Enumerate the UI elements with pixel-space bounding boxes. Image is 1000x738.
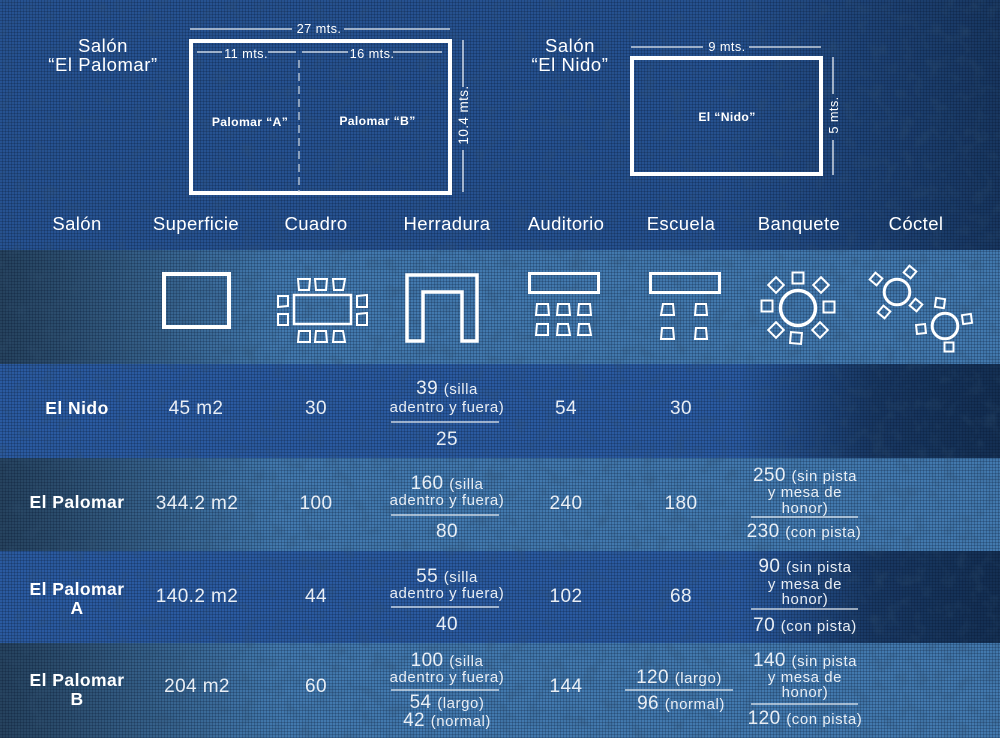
row: El Palomar A: honor): [782, 591, 828, 608]
dimension: 27 mts: 27 mts.: [297, 21, 341, 36]
icon: herradura layout: [407, 275, 477, 341]
table column headings: Auditorio: [528, 213, 604, 234]
row: El Palomar B: 100 (silla: [411, 650, 483, 671]
table column headings: Escuela: [647, 213, 716, 234]
title: Salón El Palomar: Salón: [78, 35, 128, 56]
table column headings: Salón: [52, 213, 102, 234]
table column headings: Superficie: [153, 213, 239, 234]
row: El Palomar A: 44: [305, 586, 327, 607]
table column headings: Cóctel: [889, 213, 943, 234]
icon: cóctel layout: [870, 266, 972, 352]
label: Palomar A: Palomar “A”: [212, 115, 288, 129]
row: El Palomar: honor): [782, 500, 828, 517]
row: El Palomar B: 60: [305, 676, 327, 697]
floor plan: El Palomar: [190, 21, 471, 193]
dimension: 10.4 mts: 10.4 mts.: [456, 85, 471, 145]
dimension: 9 mts: 9 mts.: [708, 39, 746, 54]
row: El Palomar B: 120 (largo): [636, 667, 722, 688]
row: El Palomar A: 55 (silla: [416, 566, 478, 587]
row: El Palomar B: 96 (normal): [637, 693, 725, 714]
row: El Nido: 45 m2: [169, 398, 223, 419]
row: El Palomar B: y mesa de: [768, 669, 842, 686]
dimension: 16 mts: [302, 46, 442, 61]
row: El Palomar B: [30, 650, 862, 731]
row: El Palomar: 80: [436, 521, 458, 542]
row: El Palomar: 100: [300, 493, 332, 514]
table column headings: Banquete: [758, 213, 840, 234]
label: Palomar B: Palomar “B”: [339, 114, 416, 128]
row: El Palomar: El Palomar: [30, 492, 124, 512]
row: El Nido: El Nido: [45, 398, 109, 418]
room outline: El Palomar: [191, 41, 450, 193]
row: El Palomar: 344.2 m2: [156, 493, 238, 514]
row: El Palomar B: 204 m2: [164, 676, 230, 697]
icon: escuela layout: [650, 274, 720, 339]
row: El Palomar B: adentro y fuera): [390, 669, 504, 686]
row: El Palomar: 240: [550, 493, 582, 514]
row: El Palomar B: 54 (largo): [410, 692, 484, 713]
room outline: El Nido: [632, 58, 821, 174]
row: El Nido: 25: [436, 429, 458, 450]
dimension: 11 mts: [197, 46, 296, 61]
row: El Nido: 54: [555, 398, 577, 419]
icon: banquete layout: [762, 272, 834, 344]
row: El Palomar: adentro y fuera): [390, 492, 504, 509]
row: El Nido: adentro y fuera): [390, 399, 504, 416]
table column headings: Herradura: [404, 213, 491, 234]
row: El Palomar: [30, 465, 861, 542]
icon: cuadro layout: [278, 279, 367, 342]
row: El Palomar: 160 (silla: [411, 473, 483, 494]
row: El Palomar A: 90 (sin pista: [758, 556, 852, 577]
row: El Nido: 30: [670, 398, 692, 419]
row: El Palomar B: 120 (con pista): [748, 708, 862, 729]
dimension: 5 mts: 5 mts.: [826, 96, 841, 134]
row: El Palomar: 180: [665, 493, 697, 514]
row: El Palomar B: 42 (normal): [403, 710, 491, 731]
dimension: 5 mts: [826, 57, 841, 175]
row: El Palomar A: [30, 556, 858, 636]
row: El Palomar A: 40: [436, 614, 458, 635]
row: El Palomar B: 144: [550, 676, 582, 697]
row: El Palomar B: 140 (sin pista: [753, 650, 857, 671]
floor plan: El Nido: [631, 39, 841, 175]
row: El Palomar: y mesa de: [768, 484, 842, 501]
row: El Nido: 30: [305, 398, 327, 419]
table column headings: [52, 213, 943, 234]
row: El Palomar A: 68: [670, 586, 692, 607]
label: El Nido: El “Nido”: [698, 110, 756, 124]
title: Salón El Nido: Salón: [545, 35, 595, 56]
row: El Palomar A: adentro y fuera): [390, 585, 504, 602]
row: El Palomar A: El Palomar: [30, 579, 124, 599]
title: Salón El Nido: [532, 35, 608, 75]
row: El Nido: 39 (silla: [416, 378, 478, 399]
dimension: 16 mts: 16 mts.: [350, 46, 394, 61]
title: Salón El Palomar: [48, 35, 158, 75]
row: El Palomar A: 140.2 m2: [156, 586, 238, 607]
row: El Nido: [45, 378, 692, 450]
row: El Palomar: 230 (con pista): [747, 521, 861, 542]
title: Salón El Palomar: “El Palomar”: [48, 54, 158, 75]
row: El Palomar B: honor): [782, 684, 828, 701]
row: El Palomar B: El Palomar: [30, 670, 124, 690]
icon: superficie: [164, 274, 229, 327]
row: El Palomar A: y mesa de: [768, 576, 842, 593]
row: El Palomar A: 70 (con pista): [753, 615, 857, 636]
title: Salón El Nido: “El Nido”: [532, 54, 608, 75]
row: El Palomar A: 102: [550, 586, 582, 607]
dimension: 11 mts: 11 mts.: [224, 46, 268, 61]
row: El Palomar: 250 (sin pista: [753, 465, 857, 486]
divider: dashed partition: [298, 60, 300, 192]
row: El Palomar A: A: [70, 598, 84, 618]
row: El Palomar B: B: [70, 689, 84, 709]
icon: auditorio layout: [530, 274, 598, 335]
table column headings: Cuadro: [284, 213, 348, 234]
